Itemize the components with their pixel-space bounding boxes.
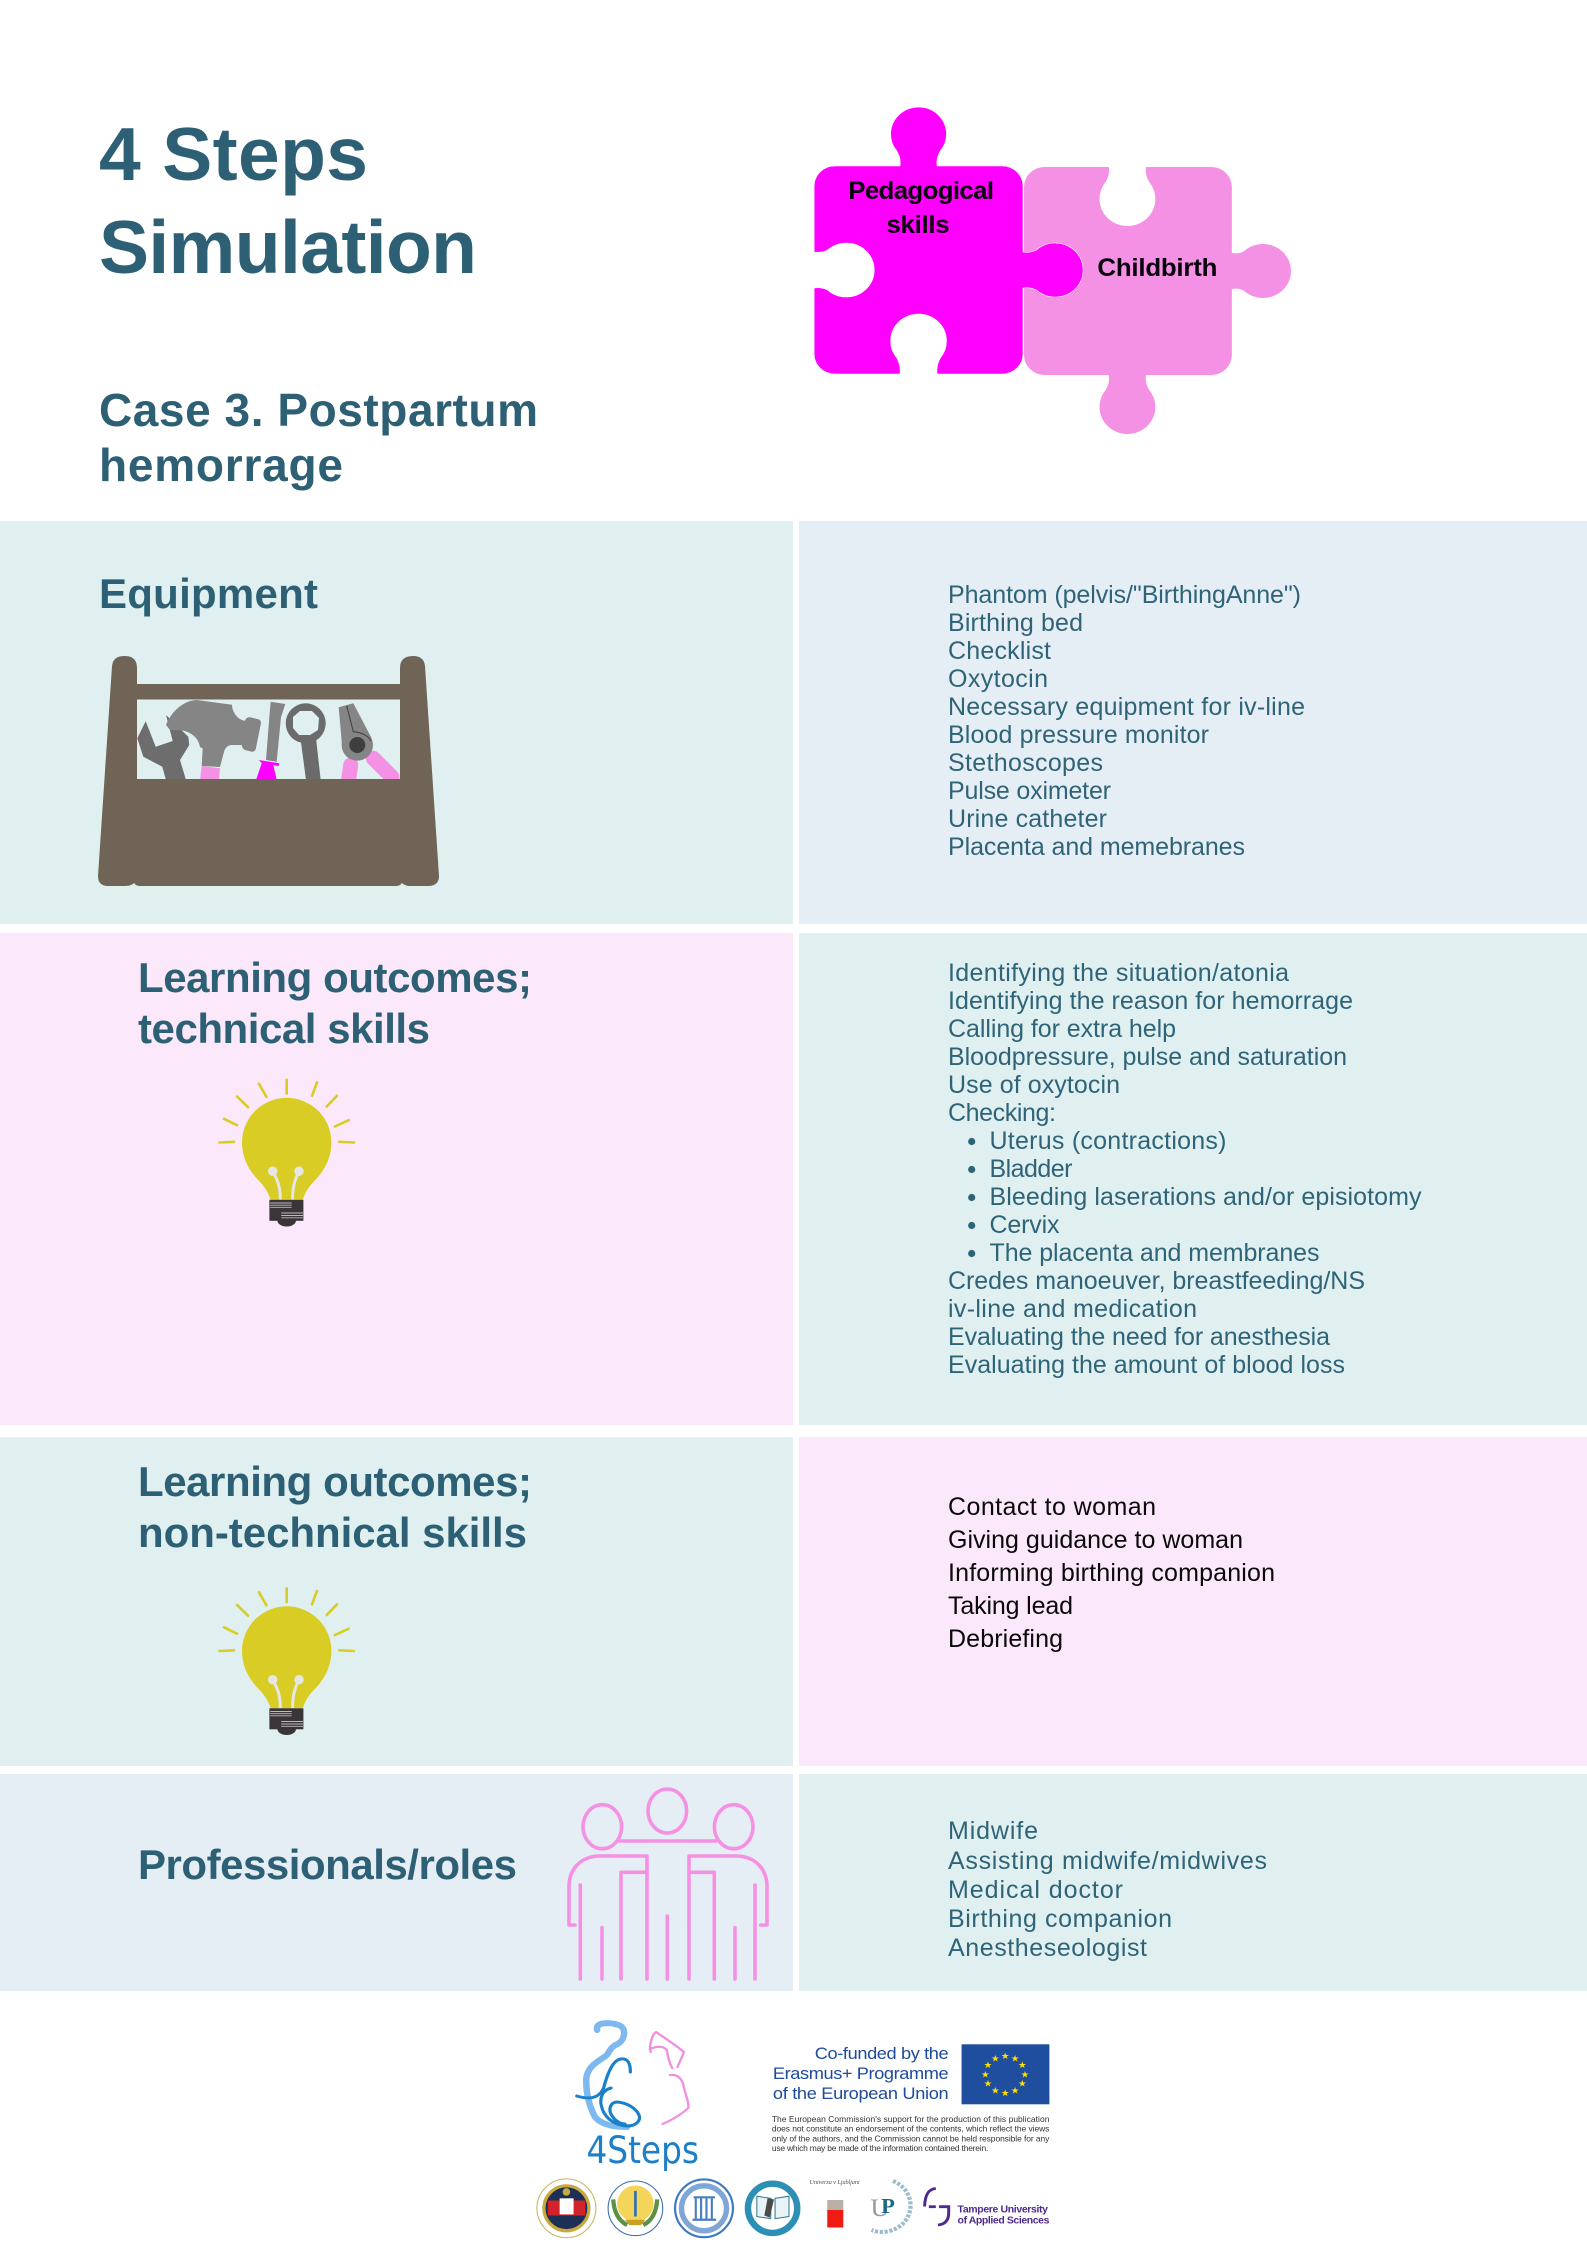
heading: professionals/roles: Professionals/roles <box>138 1841 517 1888</box>
text block: technical skills items: Identifying the situation/atonia <box>948 959 1289 987</box>
text block: technical skills items: Cervix <box>990 1211 1060 1239</box>
logo: seal 2 <box>608 2181 663 2236</box>
text block: professionals items: Assisting midwife/midwives <box>948 1847 1267 1875</box>
text: co-funded statement: Erasmus+ Programme <box>773 2064 949 2083</box>
text: disclaimer: does not constitute an endorsement of the contents, which reflect the views <box>772 2125 1049 2134</box>
text block: equipment items: Necessary equipment for iv-line <box>948 693 1305 721</box>
heading: technical skills: Learning outcomes; <box>138 954 532 1001</box>
puzzle piece: childbirth: Childbirth <box>1097 254 1217 282</box>
tool: adjustable wrench <box>137 715 189 780</box>
text block: professionals items: Midwife <box>948 1817 1038 1845</box>
text block: equipment items: Placenta and memebranes <box>948 833 1245 861</box>
heading: non-technical skills: non-technical skills <box>138 1509 527 1556</box>
icon: EU flag: ★ <box>981 2070 990 2079</box>
tool: hammer <box>166 700 261 780</box>
text block: professionals items: Medical doctor <box>948 1876 1123 1904</box>
text block: technical skills items <box>948 959 1422 1379</box>
tool: screwdriver <box>256 702 285 780</box>
text block: equipment items: Pulse oximeter <box>948 777 1111 805</box>
text block: non-technical skills items: Contact to woman <box>948 1493 1156 1521</box>
title <box>99 112 477 289</box>
logo: Tampere University of Applied Sciences: of Applied Sciences <box>958 2216 1050 2226</box>
puzzle graphic <box>814 107 1291 434</box>
text block: technical skills items: Uterus (contractions) <box>990 1127 1226 1155</box>
text block: equipment items: Checklist <box>948 637 1051 665</box>
icon: EU flag: ★ <box>1011 2054 1019 2063</box>
footer: logos and funding statement <box>537 2023 1050 2238</box>
icon: EU flag: ★ <box>1018 2079 1027 2089</box>
text block: non-technical skills items: Informing birthing companion <box>948 1559 1275 1587</box>
puzzle piece: pedagogical skills <box>814 107 1083 374</box>
logo: Univerza v Ljubljani <box>809 2179 860 2228</box>
heading: technical skills <box>138 954 532 1052</box>
heading: technical skills: technical skills <box>138 1005 430 1052</box>
text block: non-technical skills items <box>948 1493 1275 1653</box>
text block: technical skills items: The placenta and membranes <box>990 1239 1320 1267</box>
text block: equipment items: Urine catheter <box>948 805 1107 833</box>
panel: non-technical skills list <box>799 1437 1587 1766</box>
text block: technical skills items: iv-line and medication <box>948 1295 1197 1323</box>
partner logos <box>537 2179 1050 2238</box>
logo: University of Primorska: U <box>870 2194 890 2222</box>
icon: group of people <box>569 1789 767 1979</box>
puzzle piece: childbirth <box>1024 167 1291 434</box>
icon: toolbox <box>98 656 439 886</box>
logo: Tampere University of Applied Sciences <box>925 2188 1050 2226</box>
text block: professionals items: Anestheseologist <box>948 1934 1147 1962</box>
text block: technical skills items: Bladder <box>990 1155 1072 1183</box>
text block: equipment items <box>948 581 1305 861</box>
text block: non-technical skills items: Debriefing <box>948 1625 1063 1653</box>
panel: equipment <box>0 521 793 924</box>
text: disclaimer: only of the authors, and the Commission cannot be held responsible for any <box>772 2135 1050 2143</box>
panel: technical skills <box>0 933 793 1425</box>
text block: technical skills items: Bloodpressure, pulse and saturation <box>948 1043 1347 1071</box>
logo: Univerza v Ljubljani: Univerza v Ljubljani <box>809 2179 860 2186</box>
text block: professionals items <box>948 1817 1267 1962</box>
logo: University of Primorska <box>870 2181 911 2232</box>
icon: EU flag: ★ <box>1011 2086 1019 2095</box>
puzzle piece: pedagogical skills: Pedagogical <box>848 177 994 205</box>
text block: technical skills items: Calling for extra help <box>948 1015 1176 1043</box>
tool: pliers <box>339 703 392 782</box>
icon: EU flag: ★ <box>991 2054 1000 2063</box>
text block: technical skills items: Identifying the reason for hemorrage <box>948 987 1353 1015</box>
text block: equipment items: Stethoscopes <box>948 749 1103 777</box>
panel: professionals list <box>799 1774 1587 1991</box>
panel: equipment list <box>799 521 1587 924</box>
icon: EU flag: ★ <box>1001 2051 1009 2061</box>
text: co-funded statement: of the European Union <box>773 2084 949 2103</box>
text block: non-technical skills items: Giving guidance to woman <box>948 1526 1243 1554</box>
text: disclaimer: The European Commission's support for the production of this publication <box>772 2115 1050 2124</box>
heading: non-technical skills: Learning outcomes; <box>138 1458 532 1505</box>
text: disclaimer <box>772 2115 1050 2153</box>
text block: equipment items: Birthing bed <box>948 609 1083 637</box>
text block: technical skills items: Evaluating the need for anesthesia <box>948 1323 1330 1351</box>
icon: EU flag: ★ <box>1021 2070 1029 2079</box>
heading: non-technical skills <box>138 1458 532 1556</box>
toolbox body <box>98 656 439 886</box>
panel: technical skills list <box>799 933 1587 1425</box>
subtitle: case name: Case 3. Postpartum <box>99 384 538 436</box>
heading: equipment: Equipment <box>99 570 318 617</box>
text block: technical skills items: Evaluating the amount of blood loss <box>948 1351 1345 1379</box>
icon: light bulb <box>219 1588 354 1735</box>
title: 4 Steps <box>99 112 368 196</box>
text: co-funded statement: Co-funded by the <box>815 2044 949 2063</box>
text block: technical skills items: Checking: <box>948 1099 1056 1127</box>
text block: equipment items: Phantom (pelvis/"BirthingAnne") <box>948 581 1301 609</box>
text: disclaimer: use which may be made of the information contained therein. <box>772 2144 988 2153</box>
logo: 4Steps: 4Steps <box>586 2129 699 2173</box>
icon: EU flag: ★ <box>984 2079 992 2089</box>
icon: EU flag: ★ <box>984 2060 992 2070</box>
text block: equipment items: Oxytocin <box>948 665 1048 693</box>
logo: 4Steps <box>577 2023 699 2173</box>
icon: EU flag: ★ <box>991 2086 1000 2095</box>
icon: light bulb <box>219 1080 354 1226</box>
logo: Tampere University of Applied Sciences: Tampere University <box>958 2205 1048 2216</box>
icon: EU flag: ★ <box>1018 2060 1027 2070</box>
subtitle: case name <box>99 384 538 491</box>
icon: EU flag: ★ <box>1001 2088 1009 2098</box>
logo: seal 4 <box>748 2184 797 2233</box>
puzzle piece: pedagogical skills: skills <box>887 211 950 239</box>
text block: technical skills items: Use of oxytocin <box>948 1071 1120 1099</box>
subtitle: case name: hemorrage <box>99 439 343 491</box>
logo: University of Primorska: P <box>881 2195 895 2218</box>
text block: technical skills items: Bleeding laserations and/or episiotomy <box>990 1183 1422 1211</box>
text block: equipment items: Blood pressure monitor <box>948 721 1209 749</box>
logo: seal 3 <box>675 2179 733 2237</box>
icon: EU flag <box>962 2044 1049 2104</box>
tool: ring spanner <box>286 703 326 780</box>
panel: non-technical skills <box>0 1437 793 1766</box>
text: co-funded statement <box>773 2044 949 2103</box>
text block: professionals items: Birthing companion <box>948 1905 1172 1933</box>
title: Simulation <box>99 205 477 289</box>
text block: non-technical skills items: Taking lead <box>948 1592 1073 1620</box>
panel: professionals <box>0 1774 793 1991</box>
text block: technical skills items: Credes manoeuver, breastfeeding/NS <box>948 1267 1365 1295</box>
logo: seal 1 <box>537 2179 596 2238</box>
